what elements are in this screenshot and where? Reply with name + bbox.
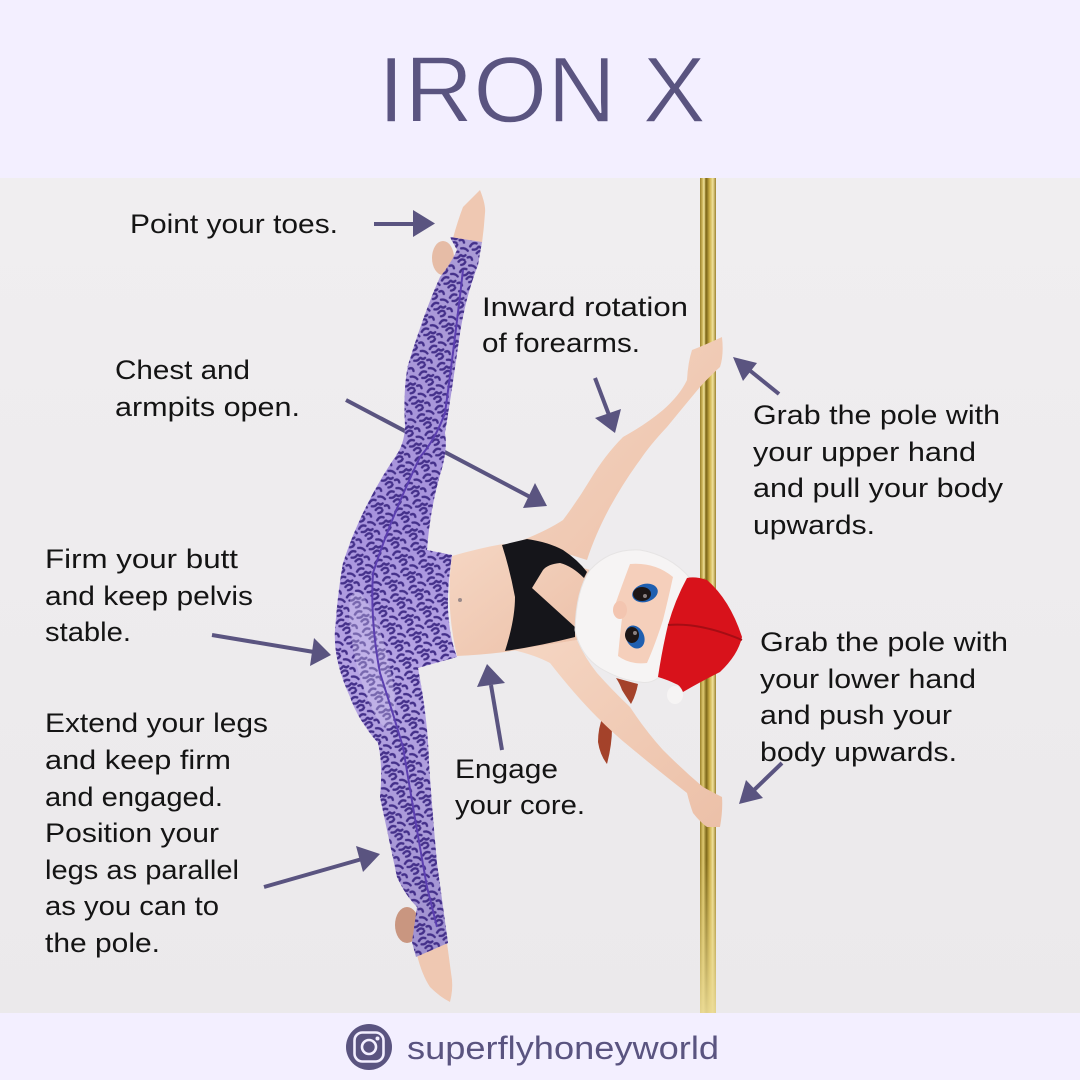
santa mask nose <box>613 601 627 619</box>
upper heel <box>432 241 454 275</box>
header band <box>0 0 1080 178</box>
arrow: lower hand <box>739 763 782 804</box>
text: engage your core: Engage <box>455 754 558 784</box>
text: inward rotation: Inward rotation <box>482 292 688 322</box>
figure: pole dancer in iron x <box>330 190 742 1002</box>
text: chest and armpits: armpits open. <box>115 392 300 422</box>
santa mask eye top <box>630 581 660 605</box>
text: upper hand: upwards. <box>753 510 875 540</box>
arrow: forearms <box>595 378 621 433</box>
icon: instagram <box>346 1024 392 1070</box>
leggings <box>334 237 482 957</box>
arrow: core <box>477 664 505 750</box>
text: upper hand <box>753 400 1004 540</box>
lower foot <box>417 943 452 1002</box>
footer handle: superflyhoneyworld <box>407 1030 719 1066</box>
arrow: chest and armpits <box>346 400 547 508</box>
text: lower hand: your lower hand <box>760 664 976 694</box>
arrow: point toes <box>374 210 435 237</box>
text: chest and armpits: Chest and <box>115 355 250 385</box>
lower heel <box>395 907 419 943</box>
hat fold <box>668 625 742 640</box>
arrow: legs <box>264 846 380 887</box>
arrow: upper hand <box>733 357 779 394</box>
text: inward rotation: of forearms. <box>482 328 640 358</box>
santa hat <box>658 577 742 692</box>
text: extend your legs: the pole. <box>45 928 160 958</box>
santa mask fur <box>575 550 690 682</box>
text: extend your legs: as you can to <box>45 891 219 921</box>
text: extend your legs: Position your <box>45 818 219 848</box>
text: lower hand <box>760 627 1008 767</box>
santa mask face <box>614 564 673 663</box>
upper foot <box>453 190 485 243</box>
hair strands <box>598 678 638 764</box>
text: extend your legs <box>45 708 268 958</box>
navel piercing <box>458 598 462 602</box>
arrow: butt <box>212 635 331 666</box>
text: lower hand: Grab the pole with <box>760 627 1008 657</box>
text: point your toes: Point your toes. <box>130 209 338 239</box>
text: firm your butt <box>45 544 253 647</box>
text: engage your core: your core. <box>455 790 585 820</box>
text: inward rotation <box>482 292 688 358</box>
background photo panel <box>0 178 1080 1013</box>
text: engage your core <box>455 754 585 820</box>
hat pom <box>667 686 683 704</box>
title: IRON X <box>378 37 706 142</box>
lower arm and hand <box>513 640 722 827</box>
torso <box>449 544 590 656</box>
pole <box>700 178 716 1013</box>
text: extend your legs: Extend your legs <box>45 708 268 738</box>
text: lower hand: body upwards. <box>760 737 957 767</box>
text: upper hand: and pull your body <box>753 473 1004 503</box>
text: firm your butt: Firm your butt <box>45 544 239 574</box>
text: lower hand: and push your <box>760 700 952 730</box>
text: extend your legs: and engaged. <box>45 782 223 812</box>
text: extend your legs: legs as parallel <box>45 855 239 885</box>
text: upper hand: your upper hand <box>753 437 976 467</box>
santa mask eye bottom <box>622 622 648 652</box>
text: chest and armpits <box>115 355 300 422</box>
text: upper hand: Grab the pole with <box>753 400 1000 430</box>
bra <box>502 539 587 651</box>
footer band <box>0 1013 1080 1080</box>
text: firm your butt: stable. <box>45 617 131 647</box>
text: firm your butt: and keep pelvis <box>45 581 253 611</box>
text: extend your legs: and keep firm <box>45 745 231 775</box>
upper arm and hand <box>523 337 723 560</box>
